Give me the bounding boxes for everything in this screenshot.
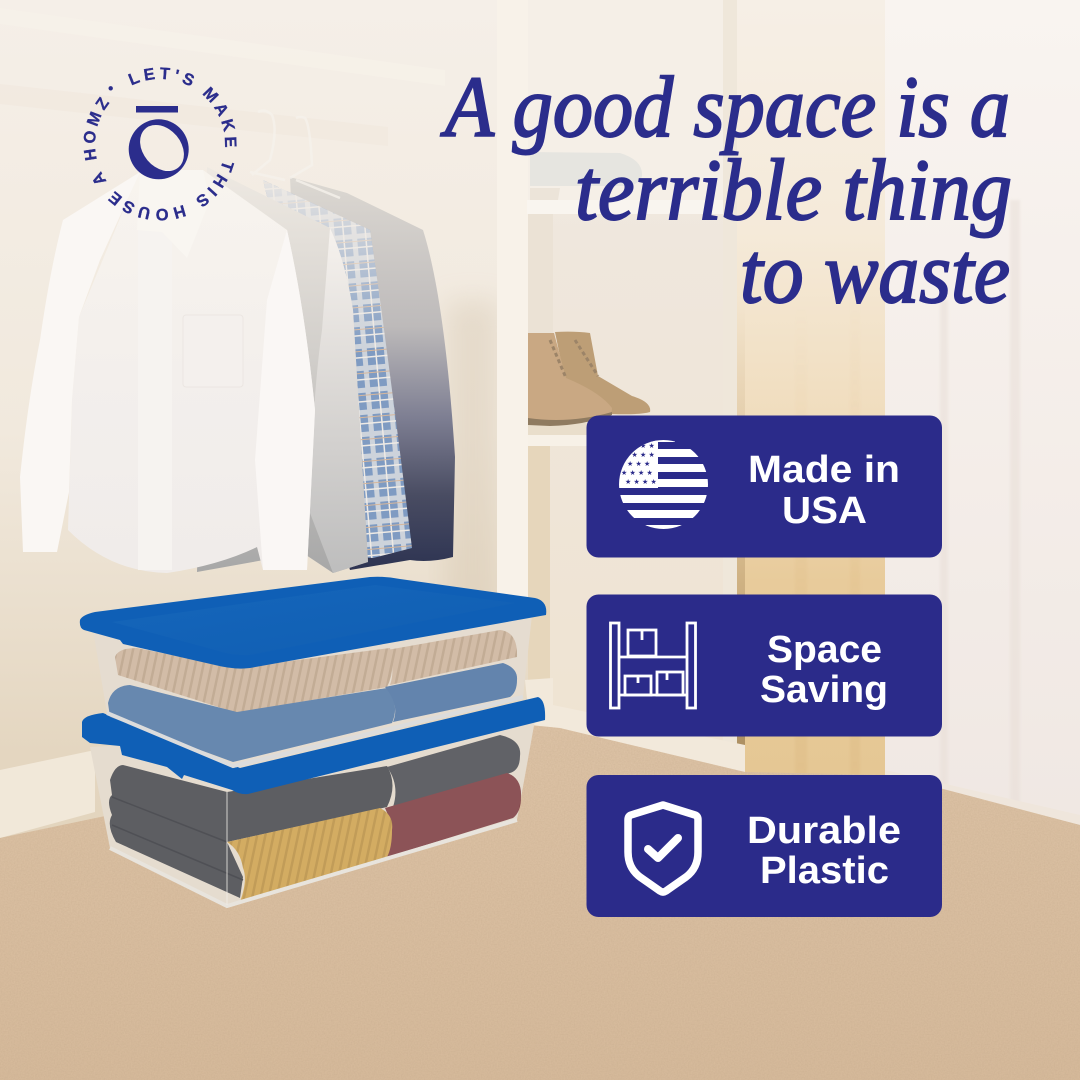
logo mark	[128, 106, 189, 180]
plaid shirt	[263, 180, 412, 558]
bottom tub	[90, 720, 535, 908]
icon: American flag: ★ ★ ★	[627, 460, 650, 468]
label: Made in	[748, 449, 900, 491]
logo badge	[84, 67, 237, 221]
icon: American flag: ★ ★ ★ ★	[621, 469, 653, 477]
folded items on upper shelf	[530, 152, 642, 200]
label: Durable	[747, 810, 901, 852]
grey shirt	[197, 167, 368, 573]
label: Plastic	[760, 850, 889, 892]
icon: shield with check	[628, 805, 698, 892]
label	[747, 810, 901, 892]
logo dot	[108, 86, 113, 91]
icon: American flag: ★ ★ ★ ★	[625, 478, 657, 486]
boots on shelf	[528, 332, 650, 426]
badge: space saving	[586, 594, 942, 736]
shelf under boots	[528, 423, 588, 686]
hanging clothes	[20, 111, 455, 573]
icon: American flag: ★ ★ ★ ★	[623, 451, 655, 459]
storage tubs	[80, 577, 546, 908]
icon: American flag	[619, 440, 710, 530]
logo circular text: LET'S MAKE THIS HOUSE A HOMZ	[84, 67, 237, 221]
carpet floor	[0, 678, 1080, 1080]
folded clothes: grey	[109, 735, 520, 898]
folded clothes: yellow	[227, 808, 392, 902]
icon: American flag: ★ ★	[640, 442, 655, 450]
label: Space	[767, 629, 882, 671]
sleeves	[20, 172, 140, 552]
pocket	[183, 315, 243, 387]
label	[748, 449, 900, 532]
headline: to waste	[740, 224, 1010, 321]
badge: made in USA	[586, 416, 942, 558]
top lid	[80, 577, 546, 669]
headline: A good space is a	[440, 58, 1010, 155]
headline	[440, 58, 1012, 321]
label: Saving	[760, 669, 888, 711]
placket	[138, 230, 172, 570]
label	[760, 629, 888, 711]
folded clothes: blue	[108, 663, 517, 762]
white shirt	[20, 170, 315, 573]
bottom lid	[82, 697, 545, 794]
headline: terrible thing	[575, 141, 1012, 238]
hangers	[250, 111, 340, 198]
collar	[137, 170, 210, 258]
folded clothes: red	[385, 773, 521, 857]
label: USA	[782, 490, 867, 532]
badge: durable plastic	[586, 775, 942, 917]
icon: shelving with boxes	[610, 623, 696, 708]
folded clothes: beige	[115, 630, 517, 713]
navy sweater	[290, 177, 455, 570]
top tub	[93, 615, 532, 768]
